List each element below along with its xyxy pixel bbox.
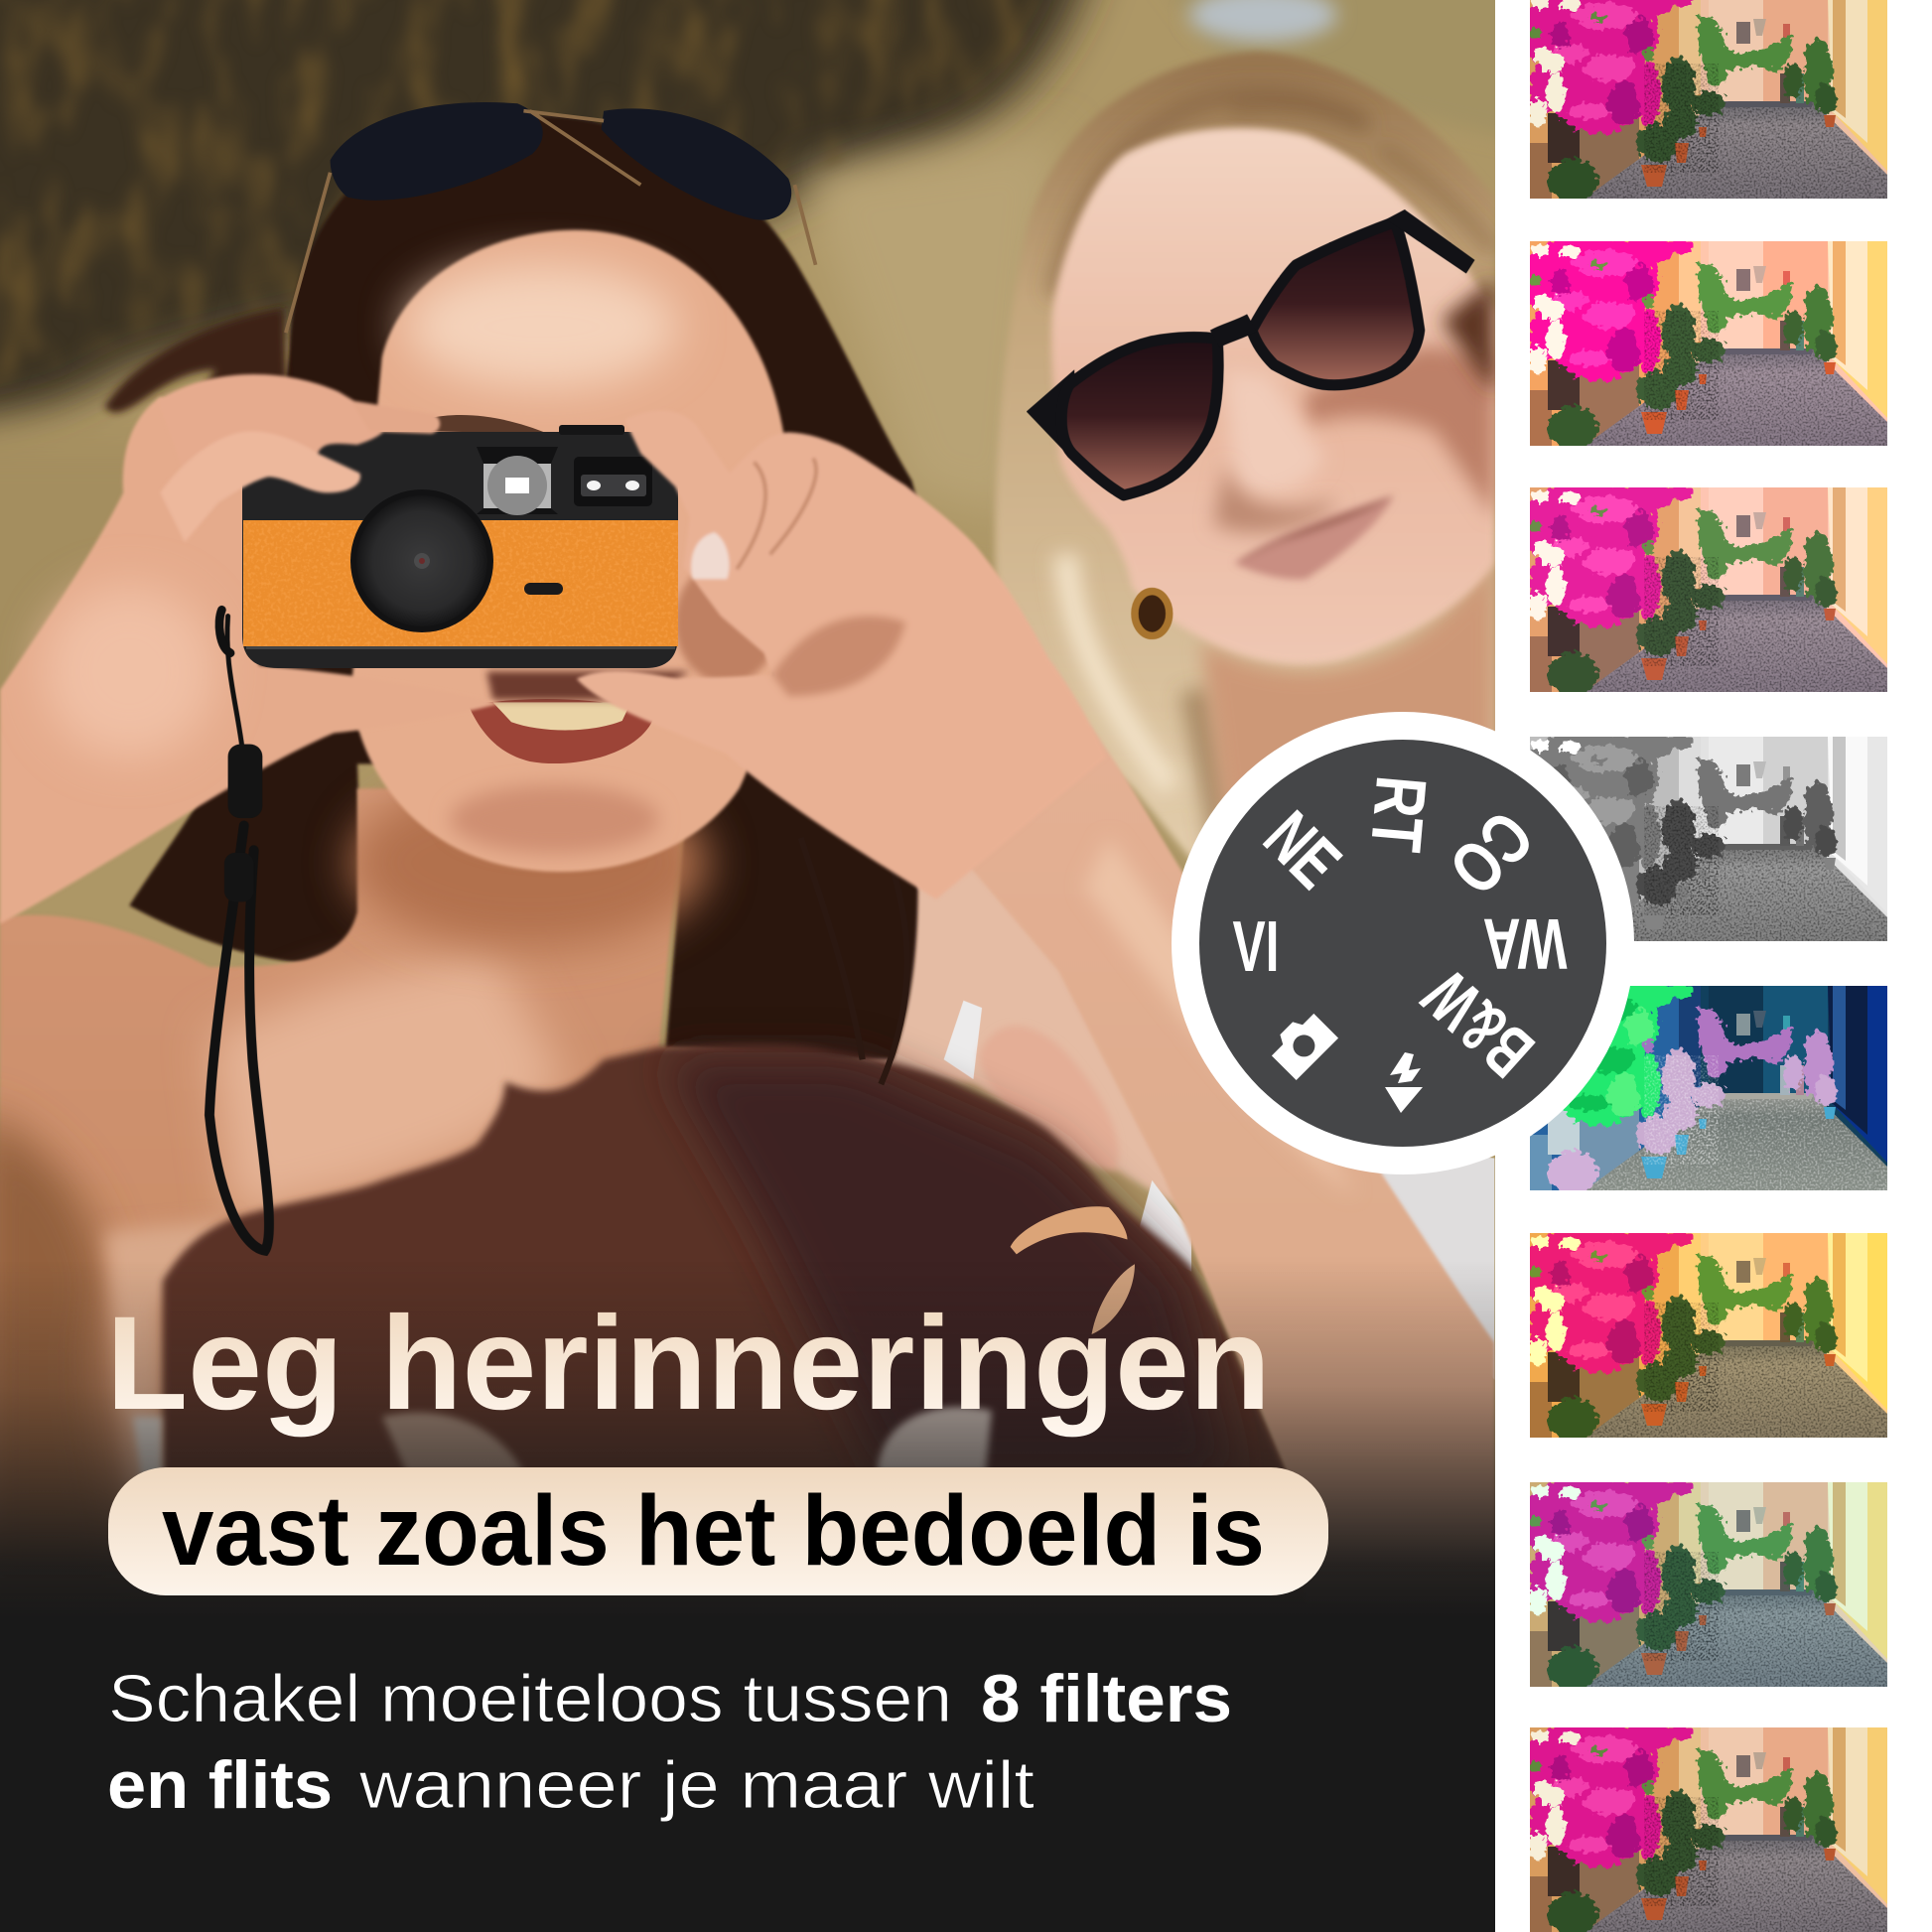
- body text: [107, 1661, 1232, 1823]
- leatherette band: [243, 520, 678, 646]
- pale patches behind heading: [133, 1407, 992, 1478]
- right forearm: highlight: [1084, 838, 1355, 1195]
- body text: 8 filters: [981, 1661, 1232, 1736]
- woman right: white strap: [944, 1001, 1191, 1272]
- woman right: shoulder behind hair: [866, 869, 1177, 1209]
- chest deep shadow: [665, 1059, 1232, 1478]
- woman right: lips: [1234, 495, 1394, 580]
- woman right: earring: [1135, 592, 1170, 635]
- woman right: hair strands: [1053, 93, 1494, 863]
- pill background: [108, 1467, 1328, 1595]
- woman right: neck: [1195, 572, 1495, 804]
- sun patch on shoulder: [1011, 1206, 1128, 1254]
- dial label B&W: B&W: [1409, 954, 1549, 1092]
- face: forehead light: [407, 265, 678, 388]
- camera body: [242, 432, 678, 668]
- woman right: side face shade: [1442, 277, 1494, 394]
- woman right: white top: [1379, 1158, 1495, 1380]
- viewfinder: [574, 457, 652, 506]
- face: mouth: [469, 671, 690, 763]
- thumbnail: warm: [1530, 1233, 1887, 1438]
- woman left: face: [351, 230, 791, 872]
- sun sliver on shoulder: [1092, 1264, 1135, 1334]
- hands over camera and strap: [158, 374, 1106, 1251]
- camera wrist strap: [209, 610, 269, 1251]
- dial label WA: WA: [1483, 903, 1567, 983]
- bottom dark gradient: [0, 1261, 1495, 1618]
- dial face: [1199, 740, 1606, 1147]
- thumbnail: retro tint: [1530, 487, 1887, 692]
- pill text: vast zoals het bedoeld is: [162, 1475, 1265, 1587]
- dial label VI: VI: [1233, 907, 1279, 987]
- woman left: left forearm and hand: [0, 397, 500, 924]
- body text: en flits: [107, 1747, 333, 1823]
- dial label RT: RT: [1355, 772, 1441, 855]
- flash window: [477, 447, 558, 515]
- chest highlight: [209, 949, 567, 1220]
- thumbnail: black and white: [1530, 737, 1887, 941]
- woman left: loose hair: [104, 308, 290, 492]
- thumbnail: portrait original: [1530, 0, 1887, 199]
- icon: flash: [1385, 1052, 1423, 1113]
- woman right: cheek shade: [1306, 345, 1494, 517]
- lit column left: [104, 1220, 234, 1553]
- dial label CO: CO: [1434, 795, 1548, 909]
- thumbnail: negative: [1530, 986, 1887, 1190]
- left hand: palm highlight: [43, 585, 215, 758]
- filter dial: [1172, 712, 1634, 1174]
- thumbnail: cool: [1530, 1482, 1887, 1687]
- chest shadow: [163, 1044, 1294, 1589]
- face: chin shading: [450, 785, 659, 854]
- camera: [242, 425, 678, 668]
- woman left: right forearm: [924, 727, 1494, 1601]
- bottom highlight: [246, 646, 675, 649]
- speaker slot: [524, 583, 563, 595]
- dark footer: [0, 1616, 1495, 1932]
- left hand fingers: [158, 374, 440, 542]
- woman left: hair: [129, 115, 949, 1059]
- woman left: hair strands right: [801, 838, 907, 1084]
- dune background: [0, 0, 1495, 1545]
- face: cheek in hand hollow: [675, 561, 778, 684]
- woman left: neck shade: [351, 776, 709, 949]
- woman right: hair: [995, 52, 1494, 888]
- photo: background, women and hands: [0, 0, 1614, 1584]
- thumbnail: repeated original: [1530, 1727, 1887, 1932]
- woman left: chest and shoulders: [0, 788, 1494, 1932]
- thumbnail: vivid: [1530, 241, 1887, 446]
- woman right: hand behind arm: [980, 1027, 1118, 1171]
- subheading pill: [108, 1467, 1328, 1595]
- filter thumbnails column: [1520, 0, 1887, 1932]
- dial label NE: NE: [1249, 797, 1355, 903]
- lens: [350, 489, 493, 632]
- body text: Schakel moeiteloos tussen: [108, 1661, 952, 1736]
- chest: dark shoulder side: [0, 1109, 136, 1601]
- right hand: [577, 410, 1106, 899]
- dial white ring: [1172, 712, 1634, 1174]
- woman right: sunglasses: [1027, 209, 1474, 495]
- body text: wanneer je maar wilt: [358, 1747, 1035, 1823]
- woman right: face: [1051, 128, 1494, 664]
- woman left: sunglasses on head: [286, 102, 816, 333]
- woman right: nose: [1213, 369, 1336, 532]
- heading: Leg herinneringen: [106, 1290, 1271, 1438]
- camera top dial: [559, 425, 624, 435]
- icon: camera: [1266, 1008, 1338, 1080]
- face: eyebrow: [425, 415, 548, 434]
